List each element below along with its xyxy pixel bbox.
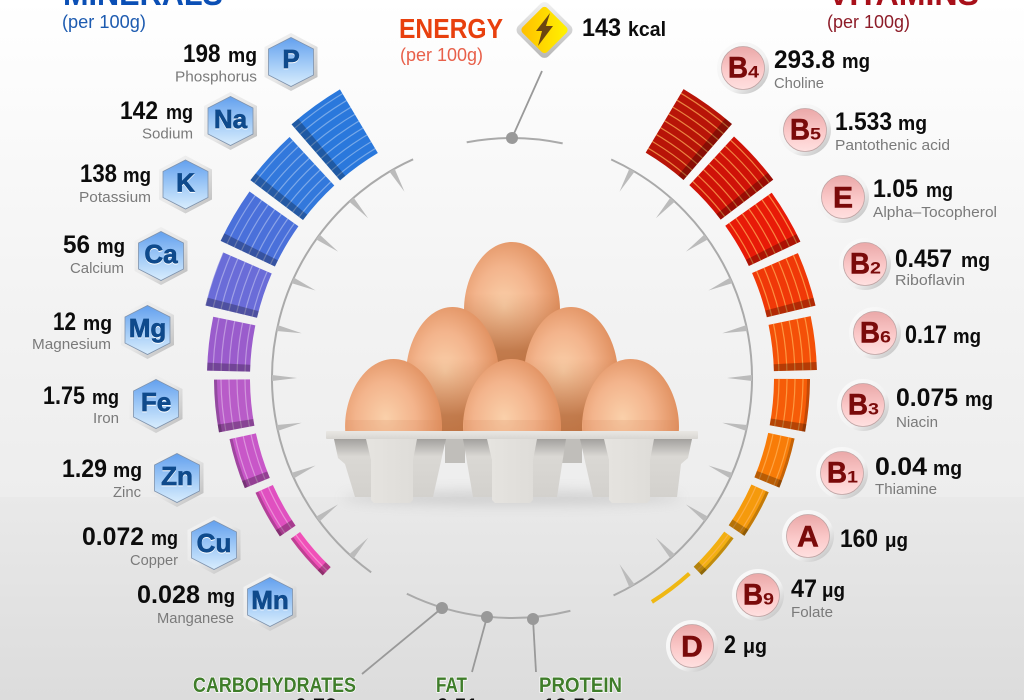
vitamin: B5 pantothenic acid: 5 xyxy=(810,124,821,144)
tray xyxy=(326,431,698,503)
vitamin: B1 thiamine xyxy=(816,447,962,499)
vitamin: B3 niacin: 3 xyxy=(868,400,879,418)
mineral: sodium: 142 xyxy=(120,97,158,125)
vitamin: D: μg xyxy=(743,636,767,658)
mineral: phosphorus: Phosphorus xyxy=(175,68,257,86)
vitamin: B4 choline: 293.8 xyxy=(774,46,835,74)
vitamin: B4 choline: 4 xyxy=(748,62,760,82)
vitamin: B9 folate: Folate xyxy=(791,604,833,621)
mineral: zinc: 1.29 xyxy=(62,455,107,483)
gauge: left arc with ticks xyxy=(177,43,847,700)
mineral: copper xyxy=(82,516,240,574)
mineral: iron: mg xyxy=(92,387,119,409)
egg: front centre xyxy=(463,359,561,477)
heading: minerals: (per 100g) xyxy=(62,12,146,32)
mineral: iron: 1.75 xyxy=(43,382,85,410)
icon: energy bolt xyxy=(514,0,575,60)
vitamin: E alpha-tocopherol xyxy=(817,171,997,223)
illustration: eggs in tray xyxy=(326,242,698,503)
macronutrient: protein: PROTEIN xyxy=(539,674,622,697)
mineral: magnesium: mg xyxy=(83,313,112,335)
egg: front left xyxy=(345,359,442,477)
mineral: sodium: mg xyxy=(166,102,193,124)
vitamin: B5 pantothenic acid: B xyxy=(790,114,810,146)
vitamin: A: A xyxy=(797,520,819,554)
mineral: magnesium: 12 xyxy=(53,308,76,336)
mineral: copper: 0.072 xyxy=(82,523,144,551)
mineral: sodium xyxy=(120,92,257,150)
vitamin: B2 riboflavin: mg xyxy=(961,250,990,272)
mineral: manganese xyxy=(137,573,296,631)
macronutrient: fat: FAT xyxy=(436,674,467,697)
vitamin: B6: 6 xyxy=(880,328,891,346)
vitamin: B6: 0.17 xyxy=(905,321,947,349)
egg: middle left xyxy=(406,307,499,435)
vitamin: B3 niacin xyxy=(837,379,993,431)
mineral: iron xyxy=(43,375,182,433)
vitamin: B9 folate: B xyxy=(743,578,763,612)
heading: vitamins xyxy=(827,0,979,32)
vitamin: B6 xyxy=(849,307,981,359)
mineral: zinc xyxy=(62,449,204,507)
vitamin: D: D xyxy=(681,630,703,664)
connector: macronutrients xyxy=(221,87,803,674)
vitamin: B9 folate: 9 xyxy=(763,590,774,608)
vitamin: B1 thiamine: 1 xyxy=(847,468,858,486)
mineral: potassium: Potassium xyxy=(79,189,151,206)
vitamin: B4 choline: Choline xyxy=(774,75,824,92)
mineral: magnesium: Magnesium xyxy=(32,336,111,353)
heading: minerals xyxy=(62,0,223,32)
egg: front right xyxy=(582,359,679,477)
vitamin: B2 riboflavin: 0.457 xyxy=(895,245,952,273)
mineral: iron: Fe xyxy=(141,387,171,417)
mineral: calcium: Ca xyxy=(144,239,178,269)
mineral: calcium: 56 xyxy=(63,231,90,259)
egg: middle right xyxy=(524,307,618,435)
mineral: phosphorus: mg xyxy=(228,45,257,67)
vitamin: B1 thiamine: Thiamine xyxy=(875,481,937,498)
macronutrient: carbohydrates: CARBOHYDRATES xyxy=(193,674,356,697)
vitamin: B5 pantothenic acid xyxy=(779,104,950,156)
vitamin: B5 pantothenic acid: 1.533 xyxy=(835,108,892,136)
heading: energy: ENERGY xyxy=(399,13,503,44)
mineral: manganese: Manganese xyxy=(157,610,234,627)
bar chart: minerals xyxy=(206,89,378,576)
vitamin: E alpha-tocopherol: mg xyxy=(926,180,953,202)
vitamin: E alpha-tocopherol: Alpha–Tocopherol xyxy=(873,204,997,221)
vitamin: B1 thiamine: B xyxy=(827,456,847,490)
vitamin: B2 riboflavin xyxy=(839,238,990,290)
vitamin: B5 pantothenic acid: mg xyxy=(898,113,927,135)
vitamin: E alpha-tocopherol: E xyxy=(833,182,853,214)
mineral: zinc: Zn xyxy=(161,461,193,491)
mineral: calcium xyxy=(63,227,188,285)
vitamin: B6: B xyxy=(860,316,880,350)
mineral: iron: Iron xyxy=(93,410,119,427)
vitamin: B9 folate: 47 xyxy=(791,575,817,603)
mineral: phosphorus xyxy=(175,33,318,91)
mineral: phosphorus: P xyxy=(282,44,300,74)
heading: energy: (per 100g) xyxy=(400,45,483,65)
vitamin: B1 thiamine: 0.04 xyxy=(875,453,927,481)
mineral: magnesium: Mg xyxy=(129,313,166,343)
vitamin: B1 thiamine: mg xyxy=(933,458,962,480)
mineral: phosphorus: 198 xyxy=(183,40,221,68)
vitamin: B5 pantothenic acid: Pantothenic acid xyxy=(835,137,950,154)
vitamin: D xyxy=(666,620,767,672)
vitamin: B9 folate xyxy=(732,569,845,621)
mineral: calcium: Calcium xyxy=(70,260,124,277)
mineral: magnesium xyxy=(32,301,174,359)
vitamin: B2 riboflavin: 2 xyxy=(870,258,881,278)
vitamin: B6: mg xyxy=(953,326,981,348)
energy value xyxy=(582,14,666,42)
vitamin: B9 folate: μg xyxy=(822,580,845,602)
mineral: potassium xyxy=(79,156,212,214)
vitamin: B3 niacin: mg xyxy=(965,389,993,411)
vitamin: B4 choline: B xyxy=(728,52,748,84)
mineral: copper: Copper xyxy=(130,552,178,569)
mineral: zinc: Zinc xyxy=(113,484,141,501)
vitamin: B3 niacin: B xyxy=(848,388,868,422)
vitamin: B2 riboflavin: B xyxy=(850,248,870,280)
mineral: sodium: Na xyxy=(214,104,248,134)
mineral: potassium: K xyxy=(176,168,195,198)
energy value: 143 xyxy=(582,14,621,42)
mineral: zinc: mg xyxy=(113,460,142,482)
connector: energy xyxy=(231,71,793,659)
mineral: potassium: mg xyxy=(123,165,151,187)
vitamin: B2 riboflavin: Riboflavin xyxy=(895,272,965,289)
floor shadow xyxy=(342,491,682,505)
vitamin: B4 choline: mg xyxy=(842,51,870,73)
mineral: sodium: Sodium xyxy=(142,126,193,142)
energy value: kcal xyxy=(628,19,666,41)
mineral: copper: Cu xyxy=(197,528,231,558)
bar chart: vitamins xyxy=(646,89,817,604)
mineral: manganese: mg xyxy=(207,586,235,608)
vitamin: B4 choline xyxy=(717,42,870,94)
mineral: manganese: 0.028 xyxy=(137,581,200,609)
egg: top xyxy=(464,242,560,370)
mineral: manganese: Mn xyxy=(251,585,289,615)
vitamin: B3 niacin: Niacin xyxy=(896,414,938,431)
heading: vitamins: (per 100g) xyxy=(827,12,910,32)
vitamin: D: 2 xyxy=(724,631,736,659)
vitamin: B3 niacin: 0.075 xyxy=(896,384,958,412)
mineral: copper: mg xyxy=(151,528,178,550)
heading: energy xyxy=(399,13,503,65)
mineral: calcium: mg xyxy=(97,236,125,258)
vitamin: A xyxy=(782,510,908,562)
vitamin: A: μg xyxy=(885,530,908,552)
mineral: potassium: 138 xyxy=(80,160,117,188)
vitamin: A: 160 xyxy=(840,525,878,553)
vitamin: E alpha-tocopherol: 1.05 xyxy=(873,175,918,203)
gauge: right arc with ticks xyxy=(194,60,830,696)
